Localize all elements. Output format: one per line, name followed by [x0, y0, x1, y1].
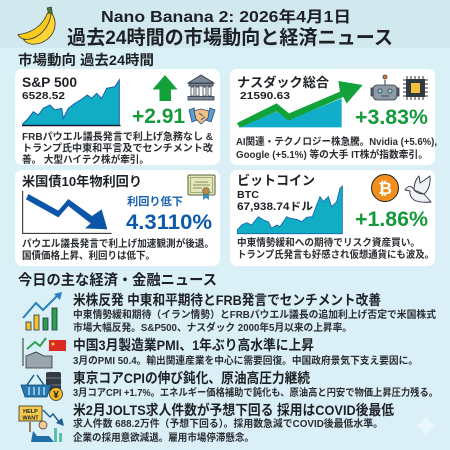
text: Bitcoin summary: トランプ氏発言も好感され仮想通貨にも波及。: [237, 248, 434, 261]
title: [67, 7, 393, 49]
text: NASDAQ summary: AI関連・テクノロジー株急騰。Nvidia (+5.6%),: [236, 135, 437, 148]
text: yield summary: [22, 237, 214, 262]
icon: basket, oil barrel and yen: [21, 372, 62, 401]
icon: rising bar chart: [23, 292, 62, 330]
icon: bitcoin: [372, 174, 398, 202]
icon: factory and China flag: [23, 338, 66, 368]
icon: help wanted sign and person: WANT: [22, 416, 39, 422]
text: yield summary: パウエル議長発言で利上げ加速観測が後退。: [22, 237, 214, 250]
chart: S&P 500 area: [22, 80, 121, 126]
icon: basket, oil barrel and yen: ¥: [53, 390, 59, 401]
panel: Bitcoin: ビットコイン: [237, 173, 315, 188]
panel: NASDAQ: [230, 69, 437, 165]
panel: NASDAQ: 21590.63: [240, 90, 290, 102]
icon: sparkle: [416, 414, 436, 437]
news item: JOLTS: 求人件数 688.2万件（予想下回る）。採用数急減でCOVID後最低水準。: [73, 417, 383, 430]
title: Nano Banana 2: 2026年4月1日: [101, 7, 351, 26]
panel: Bitcoin: [230, 170, 435, 266]
news item: US stocks: [23, 292, 436, 334]
news item: China PMI: [23, 337, 418, 368]
panel: US 10-year yield: 米国債10年物利回り: [22, 174, 142, 189]
text: S&P summary: [22, 130, 213, 166]
news item: US stocks: 米株反発 中東和平期待とFRB発言でセンチメント改善: [73, 292, 381, 308]
text: yield summary: 国債価格上昇、利回りは低下。: [22, 249, 155, 262]
news item: Tokyo CPI: 東京コアCPIの伸び鈍化、原油高圧力継続: [73, 370, 310, 386]
panel: Bitcoin: 67,938.74ドル: [237, 201, 313, 213]
icon: chip: [403, 76, 428, 100]
news item: Tokyo CPI: [21, 370, 438, 401]
panel: S&P 500: [15, 69, 220, 166]
title: 過去24時間の市場動向と経済ニュース: [67, 27, 393, 49]
text: S&P summary: トランプ氏中東和平言及でセンチメント改: [22, 142, 213, 154]
icon: certificate: [188, 175, 215, 200]
news item: US stocks: 市場大幅反発。S&P500、ナスダック 2000年5月以来の上昇率。: [73, 321, 352, 334]
value: Bitcoin change: +1.86%: [355, 208, 428, 231]
icon: robot: [371, 75, 399, 100]
icon: banana: [18, 7, 55, 44]
chart: falling yield arrow: [23, 191, 112, 233]
value: yield: 4.3110%: [126, 211, 212, 234]
icon: help wanted sign and person: [19, 406, 64, 442]
heading: today's news: 今日の主な経済・金融ニュース: [18, 271, 217, 289]
icon: bank: [188, 75, 214, 100]
chart: NASDAQ area with arrow: [237, 81, 363, 128]
panel: S&P 500: S&P 500: [22, 75, 77, 90]
icon: bitcoin: ₿: [378, 179, 392, 198]
panel: US 10-year yield: [15, 170, 220, 266]
value: NASDAQ change: +3.83%: [355, 106, 428, 129]
news item: JOLTS: 企業の採用意欲減退。雇用市場停滞懸念。: [73, 431, 254, 444]
news item: China PMI: 中国3月製造業PMI、1年ぶり高水準に上昇: [73, 337, 314, 353]
chart: Bitcoin area: [237, 186, 342, 234]
label: yield down: 利回り低下: [127, 194, 183, 208]
text: S&P summary: FRBパウエル議長発言で利上げ急務なし &: [22, 130, 213, 143]
text: NASDAQ summary: Google (+5.1%) 等の大手 IT株が指数牽引。: [236, 148, 428, 161]
news item: JOLTS: [19, 402, 394, 444]
value: S&P change: +2.91: [132, 105, 185, 128]
arrow: up: [152, 75, 178, 101]
panel: Bitcoin: BTC: [237, 189, 259, 201]
news item: US stocks: 中東情勢緩和期待（イラン情勢）とFRBパウエル議長の追加利上げ否定で米国株式: [73, 308, 436, 321]
text: Bitcoin summary: 中東情勢緩和への期待でリスク資産買い。: [237, 236, 420, 249]
icon: handshake: [189, 108, 215, 124]
icon: dove: [405, 176, 431, 202]
text: S&P summary: 善。 大型ハイテク株が牽引。: [22, 153, 149, 166]
news item: China PMI: 3月のPMI 50.4。輸出関連産業を中心に需要回復。中国政府景気下支え要因に。: [73, 354, 418, 367]
panel: S&P 500: 6528.52: [22, 90, 65, 102]
news item: JOLTS: 米2月JOLTS求人件数が予想下回る 採用はCOVID後最低: [73, 402, 394, 418]
heading: market trends: 市場動向 過去24時間: [18, 52, 154, 68]
text: NASDAQ summary: [236, 135, 437, 161]
text: Bitcoin summary: [237, 236, 434, 261]
panel: NASDAQ: ナスダック総合: [237, 75, 329, 90]
icon: help wanted sign and person: HELP: [23, 409, 38, 415]
